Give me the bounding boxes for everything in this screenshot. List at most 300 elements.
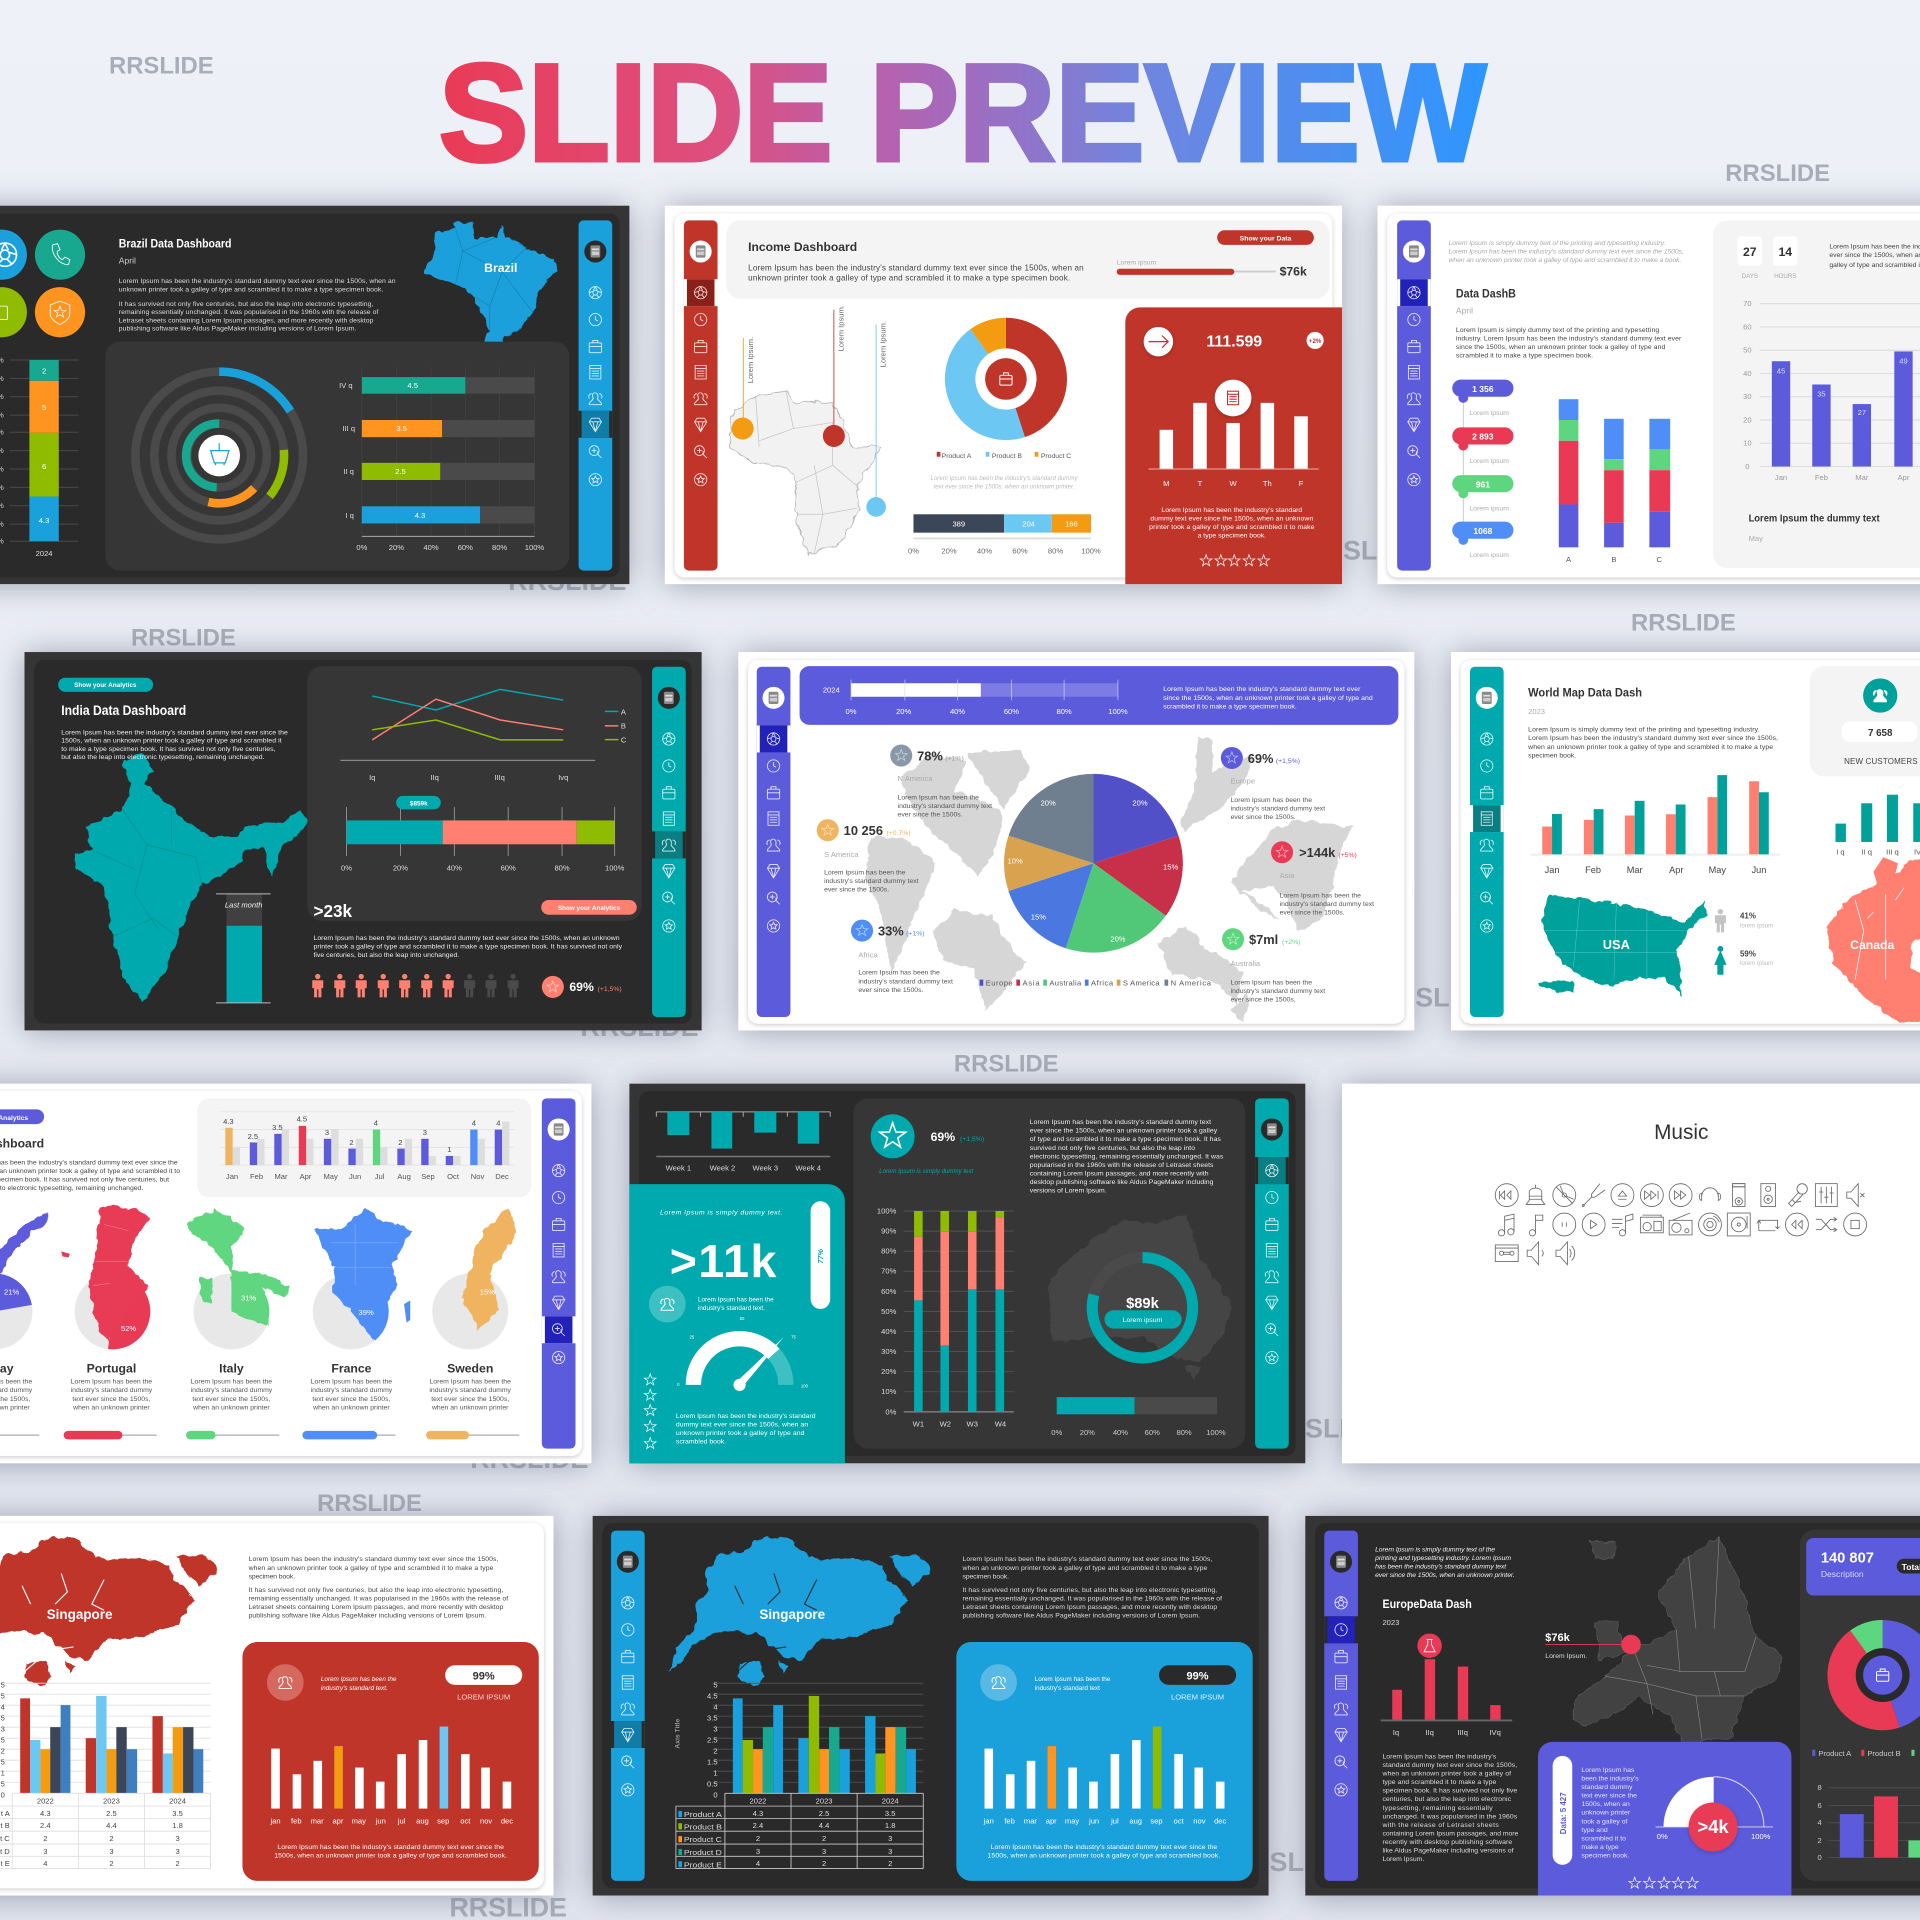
panel: monthly bars: 4 [496, 1118, 500, 1127]
body text: remaining essentially unchanged. It was popularised in the 1960s with the release of [249, 1595, 508, 1602]
panel: progress header [800, 666, 1398, 725]
watermarks: RRSLIDE [109, 52, 214, 79]
panel: countdown and bar chart: 45 [1777, 366, 1785, 375]
pie chart: 20% [1110, 935, 1126, 944]
stacked bars A B C: B [1611, 555, 1616, 564]
bar chart with data table: 5 [1, 1691, 5, 1700]
bar chart with data table: 0.5 [707, 1780, 718, 1789]
callout: S America: industry's standard dummy text [824, 878, 919, 885]
callout: Asia: Lorem Ipsum has been the [1280, 893, 1361, 900]
map: Brazil: Brazil [484, 261, 517, 275]
panel: red monthly: Lorem Ipsum has been the industry's standard dummy text ever since the [277, 1844, 504, 1851]
small bar chart: II q [1861, 848, 1872, 857]
subtitle: April [119, 255, 136, 265]
panel: totals: 140 807 [1821, 1550, 1874, 1566]
callout $76k: Lorem Ipsum. [1545, 1653, 1587, 1660]
bar chart with data table: 4.3 [753, 1809, 763, 1818]
panel: purple gauge: took a galley of [1581, 1818, 1628, 1825]
watermarks: RRSLIDE [1725, 160, 1830, 187]
panel: totals: Description [1821, 1569, 1864, 1579]
country: Sweden: 15% [480, 1287, 495, 1296]
stacked bar 2024: 4.3 [39, 516, 49, 525]
panel: header [726, 220, 1330, 299]
heading: Data DashB [1456, 287, 1516, 301]
timeline pills: 2 893 [1472, 432, 1494, 442]
italic intro: when an unknown printer took a galley of type and scrambled it to make a book. [1449, 257, 1681, 264]
body text: remaining essentially unchanged. It was popularised in the 1960s with the release of [962, 1595, 1222, 1602]
panel: teal gauge: >11k [670, 1235, 776, 1287]
bar chart with data table: 2 [109, 1859, 114, 1868]
body text: Lorem Ipsum has been the industry's standard dummy text ever since the 1500s, [962, 1556, 1212, 1563]
panel: progress header: 40% [950, 707, 965, 716]
panel: stats and stacked columns: of type and scrambled it to make a type specimen book. It has [1030, 1136, 1221, 1143]
panel: stats and stacked columns: 30% [881, 1347, 897, 1356]
country: France: 39% [359, 1308, 374, 1317]
panel: progress header: 20% [896, 707, 912, 716]
panel: teal gauge: 50 [740, 1316, 745, 1321]
panel: teal gauge: Lorem Ipsum has been the [698, 1297, 774, 1304]
panel: red monthly: nov [480, 1816, 492, 1825]
slide: Income Dashboard [665, 206, 1342, 584]
heading: Brazil Data Dashboard [119, 237, 231, 250]
bar chart with data table: t D [0, 1847, 10, 1856]
bar chart with data table: 3 [43, 1847, 47, 1856]
body text: Letraset sheets containing Lorem Ipsum passages, and more recently with desktop [962, 1604, 1217, 1611]
panel: header: Lorem Ipsum has been the industry's standard dummy text ever since the 1500s, when an [748, 264, 1084, 273]
horizontal bar chart: IV q [339, 381, 353, 390]
horizontal bar chart: 3.5 [396, 424, 407, 433]
panel: red monthly: 1500s, when an unknown printer took a galley of type and scrambled book. [274, 1853, 507, 1860]
bar chart with data table: 2.5 [819, 1809, 829, 1818]
panel: blue monthly: Lorem Ipsum has been the industry's standard dummy text ever since the [991, 1844, 1217, 1851]
panel: stats and stacked columns: containing Lorem Ipsum passages, and more recently with [1030, 1171, 1209, 1178]
bar chart with data table: 2 [43, 1834, 47, 1843]
callout: Europe: (+1,5%) [1276, 758, 1300, 765]
panel: monthly bars: 4.5 [297, 1115, 307, 1124]
body text: when an unknown printer took a galley of type and scrambled it to make a type [961, 1565, 1208, 1572]
callout: N America: (+1%) [945, 755, 964, 762]
panel: blue monthly: industry's standard text [1035, 1685, 1100, 1692]
bar chart with data table: 2.5 [106, 1809, 117, 1818]
panel: stats and stacked columns: W2 [940, 1420, 951, 1429]
timeline pills: Lorem ipsum [1469, 410, 1509, 417]
timeline pills: Lorem ipsum [1469, 506, 1509, 513]
map: Africa with pins: Lorem Ipsum. [878, 321, 887, 367]
pie chart: 20% [1041, 799, 1056, 808]
legend: Product C [1041, 453, 1071, 460]
body text: Letraset sheets containing Lorem Ipsum passages, and more recently with desktop [119, 318, 374, 325]
callout: Europe: Lorem Ipsum has been the [1231, 797, 1312, 804]
body text: printer took a galley of type and scrambled it to make a type specimen book. It has survived not only [313, 943, 623, 950]
sidebar [652, 667, 686, 1017]
grouped bar chart: Apr [1669, 865, 1683, 875]
watermarks: RRSLIDE [470, 1444, 588, 1474]
bar chart with data table: 3 [888, 1834, 892, 1843]
body text: five centuries, but also the leap into unchanged. [313, 952, 459, 959]
stacked bar: 389 [952, 520, 965, 529]
country: Norway [0, 1212, 48, 1435]
sidebar [1255, 1098, 1289, 1449]
panel: countdown and bar chart: 20 [1743, 415, 1752, 424]
bar chart with data table: 2 [1, 1746, 5, 1755]
bar chart with data table: 1.8 [172, 1821, 183, 1830]
pill: Show your Analytics [558, 905, 621, 912]
panel: line and bar charts: 100% [605, 864, 625, 873]
heading: 2023 [1382, 1618, 1399, 1627]
heading: Music [1654, 1121, 1708, 1144]
bar chart with data table: t B [1, 1821, 10, 1830]
panel: stats and stacked columns: Lorem Ipsum is simply dummy text [879, 1168, 974, 1175]
bar chart with data table: 4.3 [40, 1809, 51, 1818]
country: Sweden: text ever since the 1500s, [431, 1396, 509, 1403]
panel: totals: 6 [1817, 1801, 1822, 1810]
callout: Asia: industry's standard dummy text [1280, 901, 1374, 908]
panel: progress header: since the 1500s, when an unknown printer took a galley of type and [1163, 695, 1373, 702]
bar chart with data table: 2022 [37, 1797, 54, 1806]
panel: line and bar charts: B [621, 722, 626, 731]
panel: line and bar charts: C [621, 736, 627, 745]
pill [58, 678, 153, 692]
callout $76k [1545, 1632, 1641, 1660]
panel: totals: Product A [1818, 1749, 1852, 1758]
stacked bar 2024 [0, 355, 78, 558]
slide: World map pie [738, 652, 1414, 1030]
body text: Letraset sheets containing Lorem Ipsum passages, and more recently with desktop [249, 1604, 503, 1611]
panel: countdown and bar chart: 30 [1743, 392, 1752, 401]
panel: stats and stacked columns: 80% [1176, 1428, 1192, 1437]
bar chart with data table: 3 [109, 1847, 114, 1856]
bar chart with data table: Product A [684, 1810, 723, 1819]
bar chart with data table: 5 [1, 1757, 5, 1766]
panel: stats and stacked columns: 60% [1145, 1428, 1160, 1437]
horizontal bar chart: III q [342, 424, 355, 433]
country: Portugal: Lorem Ipsum has been the [71, 1379, 152, 1386]
last month gauge [216, 894, 271, 1003]
body text [1381, 1753, 1519, 1863]
bar chart with data table: 2.4 [40, 1821, 51, 1830]
panel: progress header: scrambled it to make a type specimen book. [1163, 703, 1297, 710]
panel: stats and stacked columns: Lorem Ipsum has been the industry's standard dummy text [1030, 1119, 1211, 1126]
panel: line and bar charts: IIq [430, 773, 439, 782]
body text [313, 935, 623, 959]
red bar chart: IIq [1425, 1728, 1434, 1737]
stacked bar 2024: 6 [42, 462, 46, 471]
panel: countdown and bar chart: HOURS [1774, 273, 1796, 280]
country: Sweden: industry's standard dummy [429, 1387, 512, 1394]
sidebar [1397, 220, 1431, 571]
bar chart with data table: 2 [888, 1859, 892, 1868]
watermarks: RRSLIDE [1231, 1847, 1349, 1877]
bar chart with data table: 4.4 [819, 1821, 829, 1830]
callout: Africa: 33% [878, 924, 904, 939]
panel: new customers [1810, 666, 1920, 776]
italic intro: ever since the 1500s, when an unknown printer. [1375, 1572, 1515, 1579]
body text: Lorem Ipsum has been the industry's standard dummy text ever since the [61, 730, 288, 737]
caption: Lorem Ipsum has been the industry's standard dummy [930, 475, 1079, 482]
panel: countdown and bar chart: May [1749, 534, 1763, 543]
panel: line and bar charts: 40% [447, 864, 462, 873]
watermarks: RRSLIDE [1631, 610, 1736, 637]
body text: Lorem Ipsum has been the industry's standard dummy text ever since the 1500s, [1528, 735, 1778, 742]
callout: Asia: >144k [1299, 845, 1336, 860]
map: Brazil [424, 222, 558, 355]
panel: stats and stacked columns: W3 [967, 1420, 978, 1429]
pie chart: 20% [1132, 799, 1148, 808]
bar chart with data table: 3 [175, 1834, 180, 1843]
stat 69%: 69% [569, 980, 594, 994]
stacked bar: 100% [1081, 546, 1101, 555]
bar chart with data table: 1 [1, 1769, 5, 1778]
horizontal bar chart: I q [345, 511, 354, 520]
panel: stats and stacked columns: 10% [881, 1387, 897, 1396]
heading [1382, 1597, 1472, 1627]
country: Sweden: when an unknown printer [431, 1404, 509, 1411]
bar chart with data table: 4 [756, 1859, 760, 1868]
callout: Australia [1222, 928, 1325, 1004]
callout: Europe [1221, 747, 1325, 821]
slide: Data DashB [1378, 206, 1920, 584]
panel: red weekly: F [1299, 479, 1304, 488]
heading: India Data Dashboard [61, 703, 186, 718]
panel: line and bar charts: A [621, 707, 627, 716]
pie chart [1004, 774, 1183, 953]
panel: purple gauge: Data: 5 427 [1559, 1792, 1568, 1834]
panel: blue monthly [956, 1642, 1253, 1881]
callout: N America: N America [898, 774, 933, 783]
bar chart with data table: Axis Title [675, 1719, 682, 1749]
bar chart with data table: 5 [713, 1680, 718, 1689]
callout: Africa: Lorem Ipsum has been the [858, 970, 940, 977]
pie chart: 15% [1163, 862, 1178, 871]
panel: totals: 8 [1817, 1783, 1822, 1792]
panel: teal gauge: Lorem Ipsum is simply dummy text. [660, 1210, 783, 1217]
bar chart with data table: Product E [684, 1860, 722, 1869]
callout: Asia: (+5%) [1338, 852, 1357, 859]
legend: Product B [992, 453, 1022, 460]
horizontal bar chart: 4.3 [415, 511, 425, 520]
body text: but also the leap into electronic typesetting, remaining unchanged. [61, 754, 265, 761]
panel: red monthly: industry's standard text. [321, 1685, 388, 1692]
pill [0, 1109, 44, 1124]
panel: stats and stacked columns: 70% [881, 1267, 897, 1276]
last month gauge: Last month [225, 900, 262, 909]
pill [541, 900, 637, 915]
caption [930, 475, 1079, 491]
sidebar [1324, 1531, 1358, 1881]
panel: countdown and bar chart: 70 [1743, 299, 1752, 308]
bar chart with data table: Product D [684, 1848, 722, 1857]
panel: red weekly: a type specimen book. [1198, 533, 1266, 540]
panel: stats and stacked columns: 0% [885, 1407, 897, 1416]
country: France: France [331, 1362, 372, 1376]
country: Italy: Italy [219, 1362, 244, 1376]
callout: Africa: ever since the 1500s. [858, 987, 924, 994]
legend [980, 979, 1212, 988]
bar chart with data table: 1.8 [885, 1821, 895, 1830]
callout: N America: Lorem Ipsum has been the [898, 795, 979, 802]
panel: blue monthly: mar [1024, 1816, 1037, 1825]
panel: countdown and bar chart: 40 [1743, 369, 1752, 378]
panel: totals [1800, 1529, 1920, 1881]
stacked bar 2024: 5 [42, 403, 46, 412]
panel: countdown and bar chart: 35 [1817, 390, 1826, 399]
callout: Europe: Europe [1231, 777, 1255, 786]
panel: blue monthly: 1500s, when an unknown printer took a galley of type and scrambled book. [988, 1853, 1220, 1860]
gender stats [1714, 909, 1773, 975]
panel: red weekly: 111.599 [1206, 334, 1262, 351]
panel: blue monthly: Lorem Ipsum has been the [1035, 1676, 1111, 1683]
map: Singapore [670, 1537, 931, 1686]
panel: monthly bars: Oct [447, 1172, 460, 1181]
timeline pills: Lorem ipsum [1469, 552, 1509, 559]
slide: Music icons [1342, 1084, 1920, 1463]
bar chart with data table: 3 [822, 1847, 826, 1856]
country: Italy: text ever since the 1500s, [192, 1396, 271, 1403]
country: Italy: 31% [241, 1293, 256, 1302]
italic intro [1449, 240, 1684, 264]
italic intro: Lorem Ipsum is simply dummy text of the printing and typesetting industry. [1449, 240, 1665, 247]
country: France [302, 1209, 411, 1439]
panel: teal gauge [629, 1184, 845, 1463]
callout $76k: $76k [1545, 1632, 1571, 1644]
panel: monthly bars [197, 1098, 531, 1198]
body text [961, 1556, 1222, 1620]
panel: countdown and bar chart: 27 [1858, 408, 1866, 417]
bar chart with data table: t E [1, 1859, 10, 1868]
legend: S America [1123, 979, 1160, 988]
sidebar [757, 667, 790, 1017]
body text: when an unknown printer took a galley of type and scrambled it to make a type [1527, 744, 1773, 751]
panel: stats and stacked columns: survived not only five centuries, but also the leap into [1030, 1145, 1195, 1152]
country: France: Lorem Ipsum has been the [311, 1379, 392, 1386]
panel: purple gauge: standard dummy [1581, 1784, 1633, 1791]
bar chart with data table: 4.5 [707, 1691, 718, 1700]
bar chart with data table: 0 [713, 1791, 718, 1800]
map: India [75, 753, 309, 1002]
body text: Lorem Ipsum has been the industry's standard dummy text ever since the 1500s, when an unknown [313, 935, 620, 942]
panel: stats and stacked columns: $89k [1126, 1296, 1160, 1312]
panel: red weekly: T [1198, 479, 1203, 488]
panel: countdown and bar chart: 50 [1743, 346, 1752, 355]
panel: monthly bars: 3 [325, 1128, 329, 1137]
panel: teal gauge: 100 [801, 1383, 809, 1388]
body text: Lorem Ipsum has been the industry's standard dummy text ever since the 1500s, [249, 1556, 498, 1563]
panel: blue monthly: jul [1110, 1816, 1119, 1825]
body text [248, 1556, 508, 1620]
pie chart: 15% [1031, 913, 1046, 922]
body text: It has survived not only five centuries, but also the leap into electronic typesetting, [249, 1587, 503, 1594]
map: Canada [1826, 857, 1920, 1022]
timeline pills: 1 356 [1472, 384, 1494, 394]
body text: when an unknown printer took a galley of [1381, 1771, 1511, 1778]
map: USA: USA [1603, 937, 1630, 952]
callout: N America: 78% [917, 748, 943, 763]
caption: text ever since the 1500s, when an unknown printer. [934, 484, 1075, 491]
panel: monthly bars: 2 [398, 1138, 403, 1147]
legend: Africa [1091, 979, 1114, 988]
stacked bars A B C [1559, 399, 1670, 564]
panel: monthly bars: Mar [274, 1172, 288, 1181]
panel: stats and stacked columns: 40% [881, 1327, 897, 1336]
bar chart with data table: 2.5 [707, 1735, 718, 1744]
grouped bar chart: Mar [1627, 865, 1643, 875]
grouped bar chart: Jun [1752, 865, 1766, 875]
icon circles [0, 230, 85, 337]
panel: stats and stacked columns: ever since the 1500s, when an unknown printer took a galley [1030, 1128, 1218, 1135]
country: Norway: 21% [4, 1287, 19, 1296]
panel: stats and stacked columns: 60% [881, 1287, 897, 1296]
bar chart with data table: 2 [713, 1746, 718, 1755]
slide: India Data Dashboard [24, 652, 702, 1030]
bar chart with data table: 1 [713, 1769, 718, 1778]
horizontal bar chart: 2.5 [395, 467, 406, 476]
bar chart with data table [0, 1680, 211, 1869]
country: Portugal: 52% [121, 1324, 136, 1333]
panel: red monthly: jul [397, 1816, 406, 1825]
body text: specimen book. [249, 1573, 295, 1580]
weekly hanging bars [656, 1112, 830, 1173]
panel: countdown and bar chart [1713, 220, 1920, 568]
country: Italy [186, 1210, 291, 1439]
country: Portugal: Portugal [87, 1362, 136, 1376]
panel: stats and stacked columns: W1 [913, 1420, 924, 1429]
panel: line and bar charts: Iq [369, 773, 375, 782]
callout: Asia [1271, 841, 1374, 917]
small bar chart [1836, 795, 1920, 857]
body text: Lorem Ipsum has been the industry's [1382, 1753, 1497, 1760]
sidebar [1470, 667, 1504, 1017]
panel: blue monthly: LOREM IPSUM [1171, 1693, 1224, 1702]
stacked bars A B C: A [1566, 555, 1572, 564]
panel: progress header: 100% [1108, 707, 1128, 716]
panel: countdown and bar chart: 14 [1779, 245, 1792, 259]
bar chart with data table: 4 [1, 1702, 5, 1711]
title: SLIDE PREVIEW [439, 36, 1486, 190]
country: Sweden: Lorem Ipsum has been the [429, 1379, 511, 1386]
small bar chart: III q [1886, 848, 1899, 857]
radial rings chart [135, 372, 303, 539]
panel: monthly bars: 2 [349, 1138, 354, 1147]
panel: blue monthly: apr [1046, 1816, 1057, 1825]
bar chart with data table: 1.5 [707, 1757, 718, 1766]
bar chart with data table: 2022 [750, 1797, 766, 1806]
bar chart with data table: 3 [713, 1724, 718, 1733]
panel: purple gauge: specimen book. [1581, 1853, 1629, 1860]
heading: April [1456, 305, 1473, 315]
gender stats: lorem ipsum [1740, 923, 1773, 930]
panel: red weekly: Lorem Ipsum has been the industry's standard [1161, 507, 1302, 514]
bar chart with data table: 2.4 [753, 1821, 763, 1830]
panel: monthly bars: 1 [447, 1145, 451, 1154]
gender stats: 41% [1740, 911, 1756, 920]
legend: Europe [986, 979, 1013, 988]
map: Africa with pins: Lorem Ipsum. [837, 305, 846, 351]
body text: Lorem Ipsum has been the industry's standard dummy text ever since the 1500s, when an [119, 278, 396, 285]
panel: blue monthly: oct [1174, 1816, 1185, 1825]
map: Africa with pins: Lorem Ipsum. [746, 337, 755, 383]
body text: specimen book. [1528, 752, 1576, 759]
bar chart with data table: 2 [822, 1859, 826, 1868]
panel: countdown and bar chart: Apr [1898, 473, 1910, 482]
timeline pills [1452, 380, 1513, 559]
panel: stats and stacked columns: popularised in the 1960s with the release of Letraset sheets [1030, 1162, 1214, 1169]
weekly hanging bars: Week 4 [795, 1164, 821, 1173]
bar chart with data table: 3.5 [885, 1809, 895, 1818]
weekly hanging bars: Week 2 [710, 1164, 735, 1173]
red bar chart [1381, 1633, 1512, 1737]
italic intro: Lorem Ipsum is simply dummy text of the [1375, 1546, 1495, 1553]
body text: Lorem Ipsum is simply dummy text of the printing and typesetting industry. [1528, 727, 1760, 734]
